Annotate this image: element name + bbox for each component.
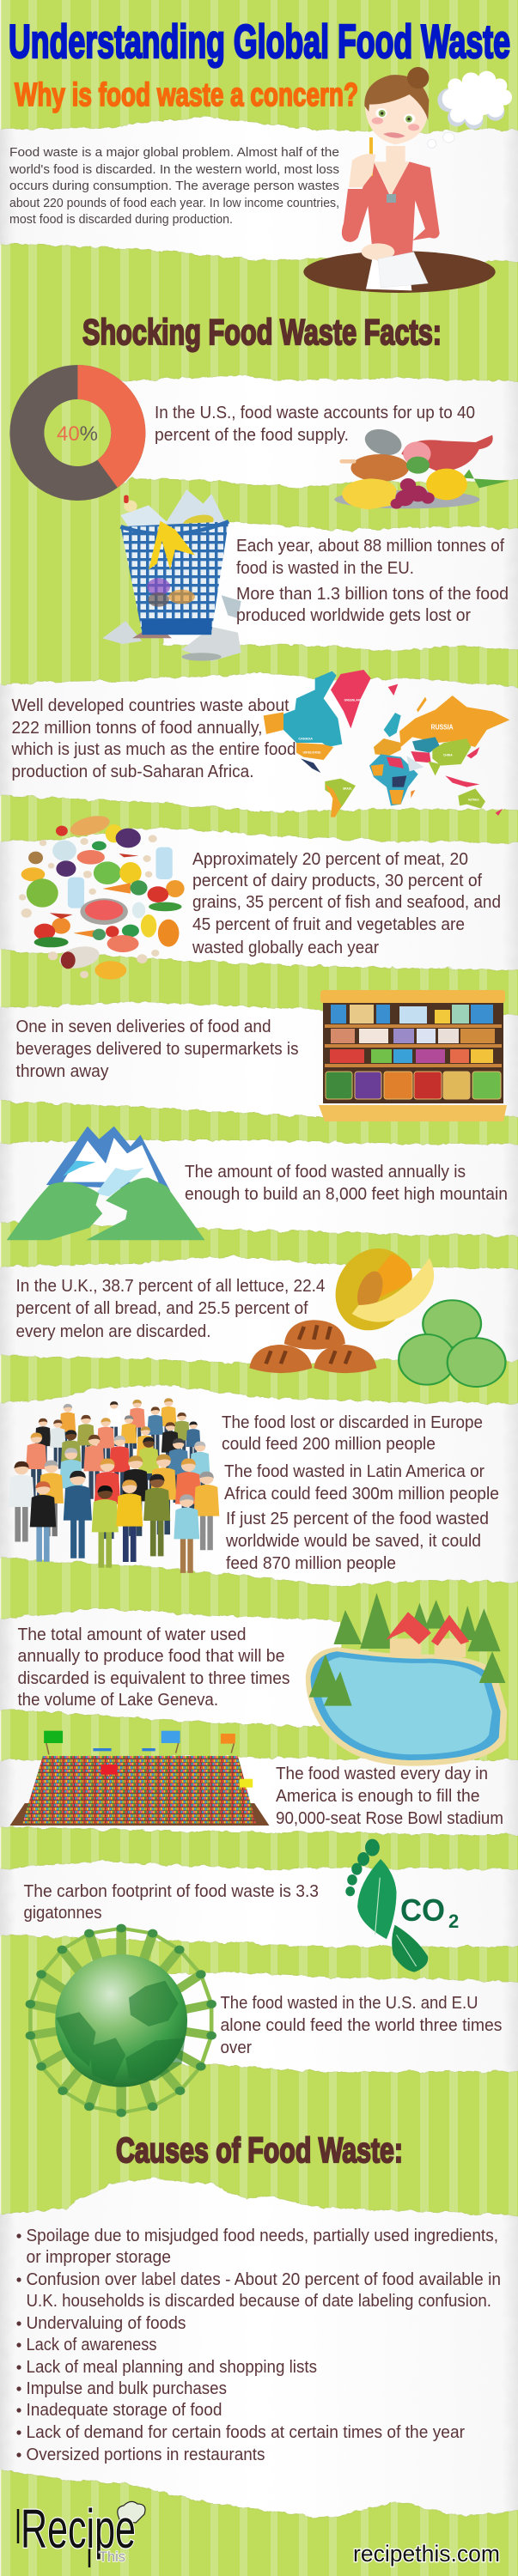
causes bullet list: Impulse and bulk purchases — [26, 2379, 227, 2398]
icon: bread rolls — [249, 1320, 376, 1373]
vegetable bins — [326, 1072, 501, 1099]
cardigan — [342, 161, 440, 256]
text: fact 2: food is wasted in the EU. — [236, 559, 414, 578]
intro text block: occurs during consumption. The average person wastes — [9, 179, 339, 193]
text: fact 12 — [220, 1994, 502, 2057]
causes bullet list: Confusion over label dates - About 20 percent of food available in — [26, 2270, 501, 2289]
intro text block: world's food is discarded. In the western world, most loss — [9, 163, 339, 177]
eyes and cheeks — [375, 108, 387, 118]
text: fact 3 — [11, 696, 296, 781]
text: fact 6: enough to build an 8,000 feet high mountain — [185, 1185, 508, 1204]
illustration: thinking woman at table — [303, 67, 512, 293]
text: fact 4: percent of dairy products, 30 percent of — [192, 872, 482, 890]
illustration: stadium crowd — [10, 1731, 269, 1826]
text: fact 9: discarded is equivalent to three times — [17, 1669, 290, 1688]
text: fact 7: every melon are discarded. — [15, 1322, 211, 1341]
houses — [386, 1612, 469, 1657]
causes bullet list: Oversized portions in restaurants — [26, 2445, 265, 2464]
text: fact 7: In the U.K., 38.7 percent of all lettuce, 22.4 — [15, 1277, 325, 1296]
text: fact 9: the volume of Lake Geneva. — [17, 1691, 218, 1710]
hands on table — [362, 243, 394, 260]
text: fact 7 — [15, 1277, 325, 1341]
illustration: mountain — [7, 1127, 204, 1240]
map label: australia: AUSTRALIA — [468, 799, 479, 802]
panel: fact 12 paper — [146, 1972, 518, 2072]
panel: fact 2 paper — [163, 521, 518, 651]
panel: fact 10 paper — [0, 1756, 518, 1835]
causes bullet list: Undervaluing of foods — [26, 2314, 186, 2333]
map label: russia: RUSSIA — [431, 723, 454, 731]
flags — [44, 1731, 253, 1788]
text: fact 1: percent of the food supply. — [155, 426, 349, 445]
logo icon: chef hat — [118, 2501, 145, 2523]
illustration: crowd of people — [9, 1398, 219, 1573]
donut label: 40% — [57, 422, 98, 446]
text: fact 12: alone could feed the world three times — [220, 2016, 502, 2035]
text: fact 5: thrown away — [15, 1062, 108, 1081]
illustration: lake and houses — [306, 1593, 507, 1766]
panel: intro paper — [0, 118, 518, 262]
icon: carbon footprint — [345, 1839, 459, 1972]
illustration: food platter — [334, 424, 509, 509]
icon: lettuce — [399, 1300, 505, 1387]
text: fact 11: The carbon footprint of food waste is 3.3 — [24, 1882, 319, 1901]
text: fact 10 — [276, 1765, 503, 1828]
causes bullet list: Lack of awareness — [26, 2336, 156, 2354]
text: fact 10: The food wasted every day in — [276, 1765, 488, 1783]
text: fact 9: annually to produce food that will be — [17, 1647, 285, 1666]
illustration: world map — [264, 670, 509, 817]
causes bullet list: U.K. households is discarded because of date labeling confusion. — [26, 2292, 491, 2311]
banana peel — [149, 521, 195, 569]
map label: usa: UNITED STATES — [303, 751, 321, 755]
raised hand — [349, 154, 375, 187]
text: fact 11 — [24, 1882, 319, 1923]
icon: carbon footprint: 2 — [448, 1911, 459, 1932]
text: fact 5: beverages delivered to supermarkets is — [15, 1040, 299, 1059]
intro text block: about 220 pounds of food each year. In low income countries, — [9, 197, 339, 210]
causes bullet list: Lack of meal planning and shopping lists — [26, 2358, 317, 2377]
panel: causes paper — [0, 2179, 518, 2518]
text: fact 2: produced worldwide gets lost or — [236, 606, 471, 625]
text: fact 5: One in seven deliveries of food and — [15, 1018, 271, 1036]
text: fact 8: feed 870 million people — [226, 1554, 396, 1573]
panel: fact 7 paper — [0, 1256, 518, 1364]
logo word: This: This — [99, 2549, 125, 2565]
panel: fact 6 paper — [0, 1140, 518, 1236]
neck and chest — [374, 146, 410, 196]
shelf row 1 products — [331, 1005, 493, 1024]
logo wordmark: Recipe — [21, 2498, 136, 2560]
text: fact 2: More than 1.3 billion tons of the food — [236, 585, 509, 604]
bun — [407, 67, 429, 88]
text: fact 11: gigatonnes — [24, 1904, 101, 1923]
panel: fact 5 paper — [0, 1002, 518, 1116]
text: fact 4: Approximately 20 percent of meat, 20 — [192, 850, 468, 869]
text: fact 8: could feed 200 million people — [222, 1435, 436, 1454]
panel: fact 3 paper — [0, 673, 518, 811]
text: fact 3: production of sub-Saharan Africa. — [12, 762, 254, 781]
heading: causes of food waste: Causes of Food Waste: — [116, 2130, 403, 2170]
label: CO2: CO — [400, 1893, 445, 1928]
causes bullet list — [16, 2227, 501, 2464]
shelf row 3 products — [330, 1049, 493, 1063]
trees behind lake — [333, 1593, 501, 1651]
text: fact 4 — [192, 850, 501, 957]
text: fact 3: which is just as much as the entire food — [11, 740, 296, 759]
text: fact 12: over — [220, 2038, 252, 2057]
text: fact 4: wasted globally each year — [192, 939, 379, 957]
table — [303, 251, 496, 293]
text: fact 8: The food wasted in Latin America or — [224, 1462, 484, 1481]
intro text block: Food waste is a major global problem. Almost half of the — [9, 146, 339, 160]
map label: china: CHINA — [443, 753, 453, 757]
trees on lake shore — [309, 1651, 505, 1706]
shelf row 2 products — [331, 1029, 495, 1043]
text: fact 10: America is enough to fill the — [276, 1787, 479, 1806]
icon: thought cloud — [428, 71, 512, 148]
text: fact 4: grains, 35 percent of fish and seafood, and — [192, 893, 501, 912]
text: fact 9 — [17, 1625, 290, 1710]
text: fact 8: The food lost or discarded in Europe — [222, 1413, 483, 1432]
text: fact 3: Well developed countries waste about — [12, 696, 289, 715]
globe — [55, 1954, 187, 2087]
text: fact 10: 90,000-seat Rose Bowl stadium — [276, 1809, 503, 1828]
text: fact 7: percent of all bread, and 25.5 percent of — [15, 1299, 308, 1318]
causes bullet list: Spoilage due to misjudged food needs, partially used ingredients, — [26, 2227, 498, 2245]
text: fact 2: Each year, about 88 million tonnes of — [236, 537, 504, 556]
text: fact 8: Africa could feed 300m million people — [224, 1485, 499, 1504]
ring of figures — [26, 1924, 216, 2117]
illustration: melon bread lettuce — [249, 1241, 505, 1387]
heading: why is food waste a concern: Why is food waste a concern? — [15, 77, 358, 113]
illustration: supermarket shelf — [319, 990, 507, 1121]
text: fact 6: The amount of food wasted annually is — [185, 1163, 466, 1182]
illustration: globe with ring of people — [26, 1924, 216, 2117]
website url: recipethis.com — [353, 2541, 500, 2567]
donut chart: 40 percent — [27, 365, 145, 488]
map label: brazil: BRAZIL — [343, 787, 353, 790]
panel: fact 1 paper — [120, 375, 518, 487]
panel: fact 11 paper — [0, 1862, 518, 1947]
text: fact 8: worldwide would be saved, it could — [225, 1532, 481, 1551]
text: fact 12: The food wasted in the U.S. and E.U — [220, 1994, 478, 2013]
map label: greenland: GREENLAND — [344, 698, 362, 702]
text: fact 6 — [185, 1163, 508, 1204]
papers — [120, 505, 172, 532]
text: fact 3: 222 million tonns of food annually, — [12, 719, 263, 738]
text: fact 1: In the U.S., food waste accounts for up to 40 — [155, 404, 475, 422]
panel: fact 9 paper — [0, 1608, 344, 1728]
lake — [306, 1647, 507, 1766]
text: fact 8: If just 25 percent of the food wasted — [226, 1510, 489, 1528]
head — [365, 94, 427, 144]
intro text block: most food is discarded during production. — [9, 213, 233, 227]
causes bullet list: Lack of demand for certain foods at certain times of the year — [26, 2423, 465, 2442]
hair — [364, 75, 429, 120]
text: fact 1 — [155, 404, 475, 445]
pencil — [369, 137, 373, 176]
causes bullet list: or improper storage — [26, 2248, 171, 2267]
icon: melon — [326, 1241, 434, 1338]
logo icon: spoon and fork — [18, 2509, 89, 2567]
bin body — [120, 521, 229, 633]
illustration: food circle — [19, 812, 185, 980]
illustration: waste basket — [102, 489, 241, 661]
intro text block — [9, 146, 339, 227]
causes bullet list: Inadequate storage of food — [26, 2401, 222, 2420]
text: fact 2 — [236, 537, 509, 625]
logo: Recipe This — [18, 2498, 145, 2567]
text: fact 9: The total amount of water used — [17, 1625, 246, 1644]
debris — [102, 595, 241, 661]
map label: canada: CANADA — [298, 736, 313, 740]
panel: fact 8 paper — [0, 1385, 518, 1586]
text: fact 8 — [222, 1413, 499, 1573]
text: fact 4: 45 percent of fruit and vegetables are — [192, 915, 465, 934]
panel: fact 4 paper — [0, 828, 518, 970]
papers — [366, 259, 411, 290]
text: fact 5 — [15, 1018, 299, 1081]
